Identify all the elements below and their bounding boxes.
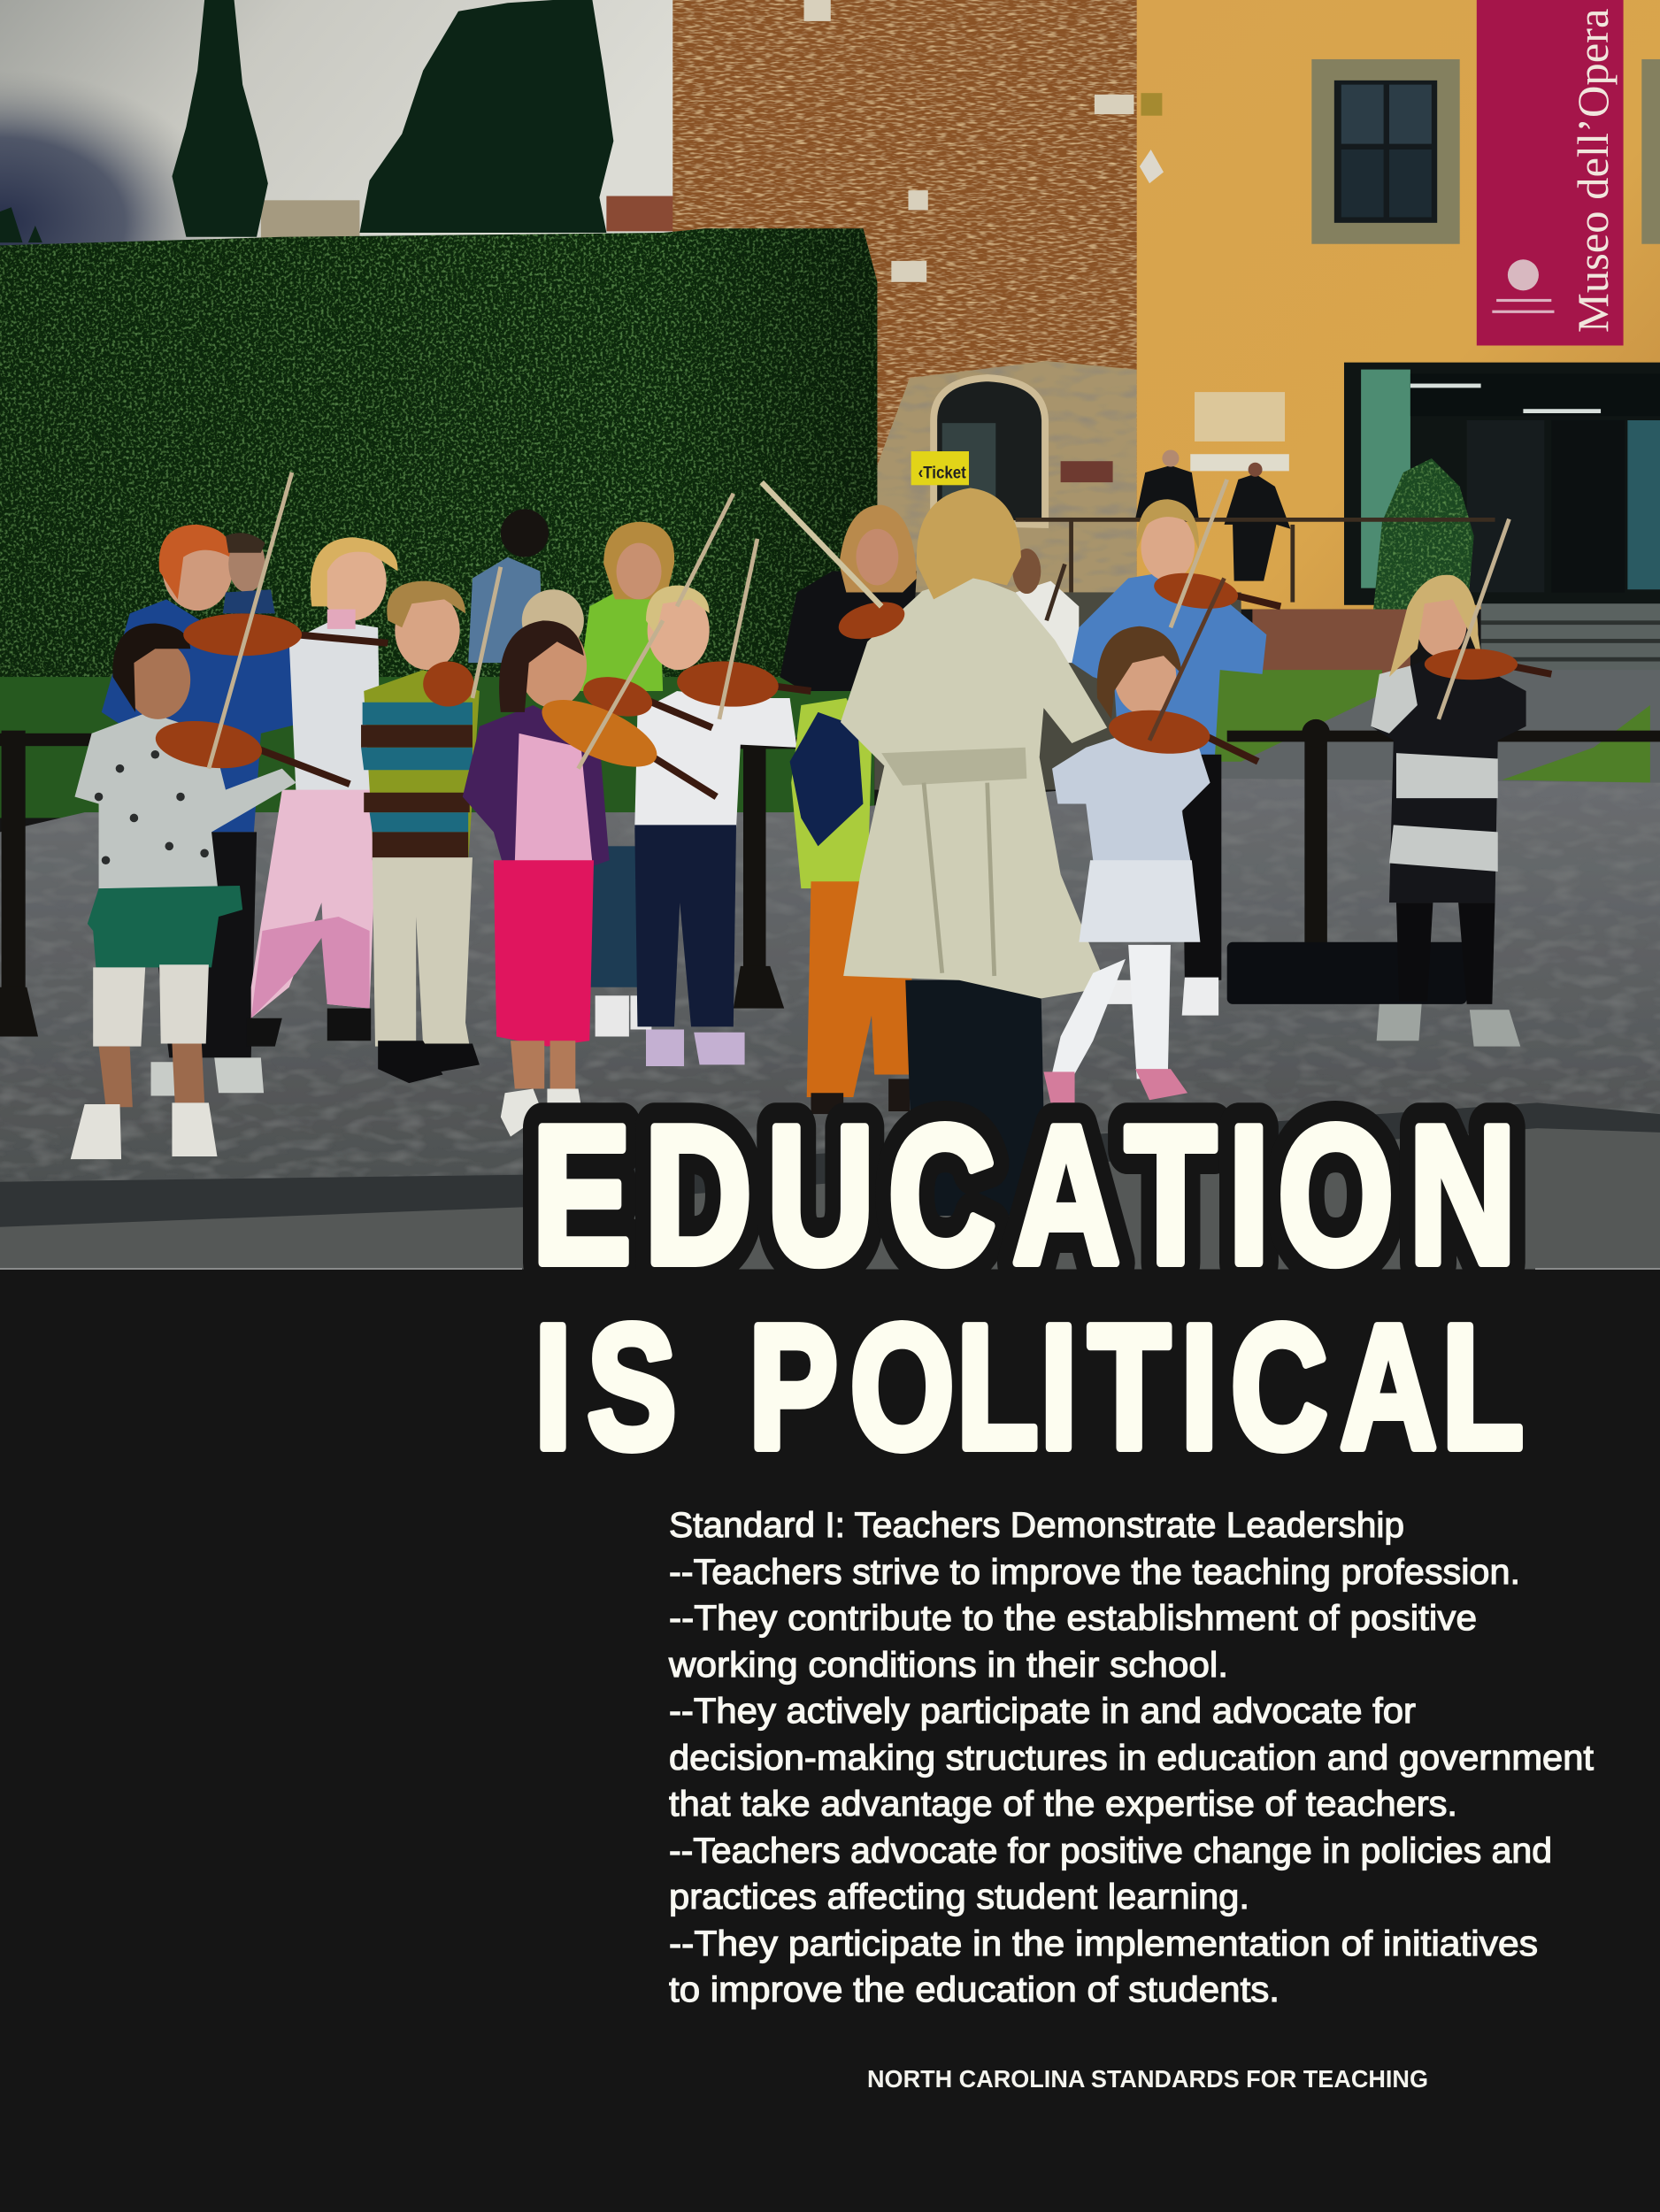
body text: Standard I: --Teachers strive to improve the teaching profession. xyxy=(669,1553,1520,1592)
child: man behind teacher xyxy=(1012,549,1079,663)
child: girl in black coat behind teacher xyxy=(780,505,917,691)
child: girl in pale stripes and white skirt xyxy=(1043,626,1210,1102)
yellow museum wall xyxy=(1137,0,1660,610)
brick tower xyxy=(672,0,1138,592)
museum banner: Museo dell’Opera xyxy=(1569,8,1618,333)
museum banner xyxy=(1477,0,1624,346)
body text: Standard I: practices affecting student learning. xyxy=(669,1878,1249,1916)
ground base behind figures xyxy=(0,592,1660,818)
body text: Standard I: to improve the education of students. xyxy=(669,1970,1280,2009)
guards on the steps xyxy=(1135,449,1290,581)
front railing with posts xyxy=(0,719,1660,1037)
child: boy in striped sweater xyxy=(361,581,480,1083)
teacher in trench coat xyxy=(841,488,1107,1216)
child: blonde girl with pink trousers xyxy=(247,537,398,1047)
background buildings xyxy=(261,196,677,240)
child: girl in blue jacket and black trousers xyxy=(1072,499,1266,1016)
violin case xyxy=(1227,942,1467,1004)
body text: Standard I: --Teachers advocate for positive change in policies and xyxy=(669,1832,1552,1870)
body text: Standard I: Standard I: Teachers Demonstrate Leadership xyxy=(669,1506,1404,1545)
curb and road xyxy=(0,1102,1660,1270)
title line 1: EDUCATION xyxy=(532,1086,1517,1304)
violins and bows xyxy=(152,472,1551,797)
bush xyxy=(1372,458,1474,620)
body text: Standard I: --They actively participate in and advocate for xyxy=(669,1692,1416,1731)
sky xyxy=(0,0,677,247)
stone doorway xyxy=(877,361,1137,592)
child: girl in purple cardigan and pink trousers xyxy=(463,620,610,1137)
wall tablets on tower xyxy=(804,0,1134,282)
glass storefront xyxy=(1344,363,1660,605)
body text: Standard I: --They contribute to the establishment of positive xyxy=(669,1599,1477,1638)
body text: Standard I: that take advantage of the expertise of teachers. xyxy=(669,1785,1457,1824)
lower dark panel xyxy=(0,1270,1660,2212)
child: girl in black and white striped dress xyxy=(1371,575,1526,1047)
body text: Standard I: --They participate in the implementation of initiatives xyxy=(669,1924,1538,1963)
body text: Standard I xyxy=(668,1506,1594,2009)
security camera xyxy=(1140,93,1164,183)
plaques xyxy=(1190,392,1289,471)
body text: Standard I: decision-making structures in education and government xyxy=(669,1739,1594,1778)
body text: Standard I: working conditions in their school. xyxy=(668,1646,1228,1685)
right window edge xyxy=(1641,59,1660,244)
pavement xyxy=(0,779,1660,1206)
cypress trees xyxy=(0,0,613,242)
photo: children's violin group with teacher in front of museum xyxy=(0,0,1660,1270)
child: girl with cat-print sweater xyxy=(71,624,296,1159)
child: child in hi-vis vest and orange trousers xyxy=(790,698,914,1114)
rear railing xyxy=(1016,518,1495,603)
ticket sign xyxy=(911,451,969,485)
steps xyxy=(1481,603,1660,688)
man in denim jacket xyxy=(468,509,549,663)
ticket sign: ‹Ticket xyxy=(918,464,966,482)
child: white-haired child behind xyxy=(522,589,584,651)
window with stone frame xyxy=(1311,59,1460,244)
child: red-haired child in blue xyxy=(102,525,327,1095)
title line 2: IS POLITICAL xyxy=(534,1289,1524,1486)
child: girl in neon green xyxy=(578,522,674,1037)
title band xyxy=(0,1086,1660,2212)
hedge xyxy=(0,228,877,691)
dark outline behind EDUCATION: EDUCATION xyxy=(532,1086,1517,1304)
grass strips xyxy=(1213,670,1650,783)
child: girl in white top and navy jeans xyxy=(634,585,797,1066)
low brick planter xyxy=(1252,610,1410,674)
source attribution: NORTH CAROLINA STANDARDS FOR TEACHING xyxy=(867,2065,1428,2093)
